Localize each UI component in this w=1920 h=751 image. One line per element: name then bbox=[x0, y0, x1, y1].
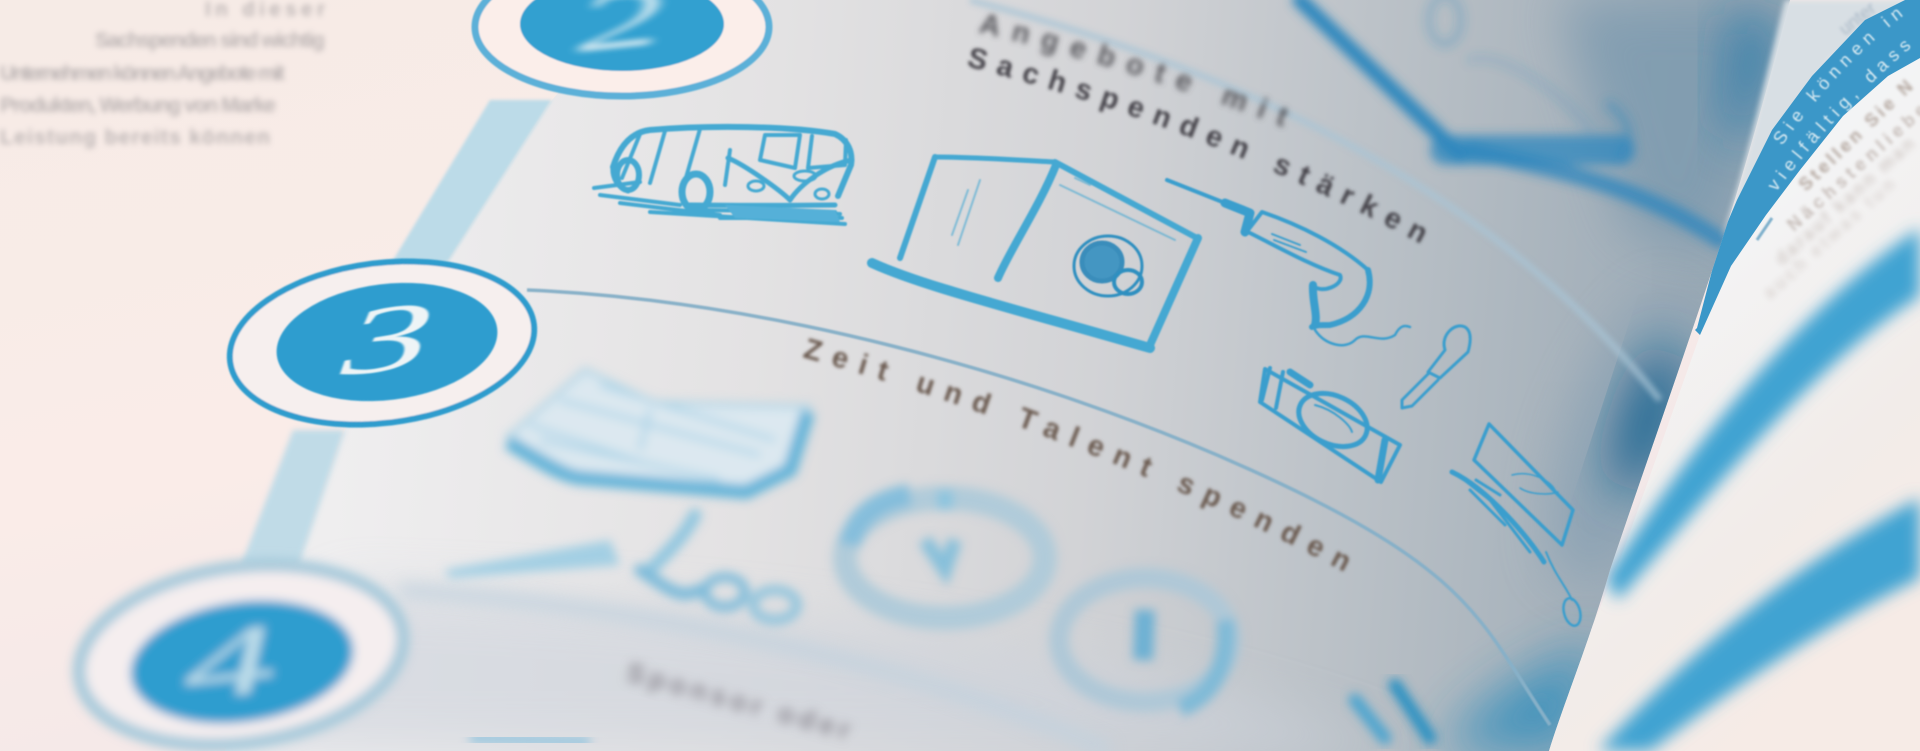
timeline connector: step 3 to 4 bbox=[241, 430, 345, 565]
blue stripe 2 bbox=[1598, 498, 1920, 751]
icon: blurred stopwatch right bbox=[1059, 578, 1231, 708]
blue text band bbox=[1695, 0, 1920, 335]
panel: right page bbox=[1549, 0, 1920, 751]
body text of the right page: auch etwas tun bbox=[1759, 174, 1899, 303]
band text: Sie können in bbox=[1773, 8, 1904, 145]
blurred body text top left: Sachspenden sind wichtig bbox=[95, 29, 325, 52]
icon: blurred bottom left symbol bbox=[470, 738, 590, 742]
icon: laptop with mouse bbox=[1452, 424, 1583, 628]
separator line of step 3 bbox=[527, 290, 1550, 725]
body text of the right page: darauf kann man bbox=[1771, 134, 1918, 269]
icon: blurred stopwatch left bbox=[845, 490, 1045, 618]
spine shadow: upper dark bbox=[1725, 10, 1780, 150]
spine shadow: upper bbox=[1560, 0, 1790, 250]
icon: camera bbox=[1260, 368, 1400, 482]
icon: washing machine bbox=[872, 157, 1198, 348]
step badge 4 bbox=[67, 545, 415, 751]
faint upper separator line bbox=[970, 0, 1660, 400]
step badge 3 bbox=[220, 245, 544, 441]
heading: Angebote mit Sachspenden stärken: Angebote mit bbox=[976, 11, 1291, 130]
spine shadow: bottom bbox=[1440, 640, 1600, 751]
icon: camper van bbox=[594, 127, 852, 224]
blurred body text top left bbox=[0, 0, 325, 149]
upper grey strip of the right page bbox=[1722, 0, 1912, 238]
separator line of step 4 bbox=[398, 579, 1038, 722]
blurred body text top left: Unternehmen können Angebote mit bbox=[0, 62, 285, 85]
body text of the right page: Stellen Sie N bbox=[1795, 76, 1917, 195]
icon: blurred bottom right symbol bbox=[1355, 685, 1430, 738]
blue stripe 1 bbox=[1606, 228, 1920, 600]
bottom tint of the panel bbox=[277, 590, 901, 751]
numeral 3: 3 bbox=[336, 280, 439, 398]
band text: vielfältig, dass bbox=[1768, 40, 1911, 190]
timeline connector: step 2 to 3 bbox=[392, 100, 552, 262]
blurred body text top left: Leistung bereits können bbox=[0, 126, 270, 149]
heading: blurred step 4 title: Sponsor oder bbox=[623, 657, 854, 745]
numeral 4: 4 bbox=[177, 603, 282, 722]
blurred body text top left: Produkten, Werbung von Marke bbox=[0, 94, 276, 117]
spine shadow: soft glow bbox=[1540, 302, 1696, 582]
icon: drill bbox=[1167, 180, 1410, 345]
spine shadow: middle bbox=[1602, 341, 1694, 499]
icon: blurred open book bbox=[508, 370, 809, 492]
heading: Zeit und Talent spenden: Zeit und Talent spenden bbox=[801, 336, 1351, 573]
icon: small arrow in right page bbox=[1757, 218, 1772, 240]
heading: Angebote mit Sachspenden stärken: Sachspenden stärken bbox=[966, 46, 1428, 245]
icon: screwdriver bbox=[1402, 326, 1470, 408]
body text of the right page bbox=[1759, 76, 1920, 303]
icon: blurred tool with chain bbox=[445, 515, 797, 620]
step badge 2 bbox=[475, 0, 769, 96]
icon: large blurred book illustration at top right bbox=[1300, 0, 1720, 240]
